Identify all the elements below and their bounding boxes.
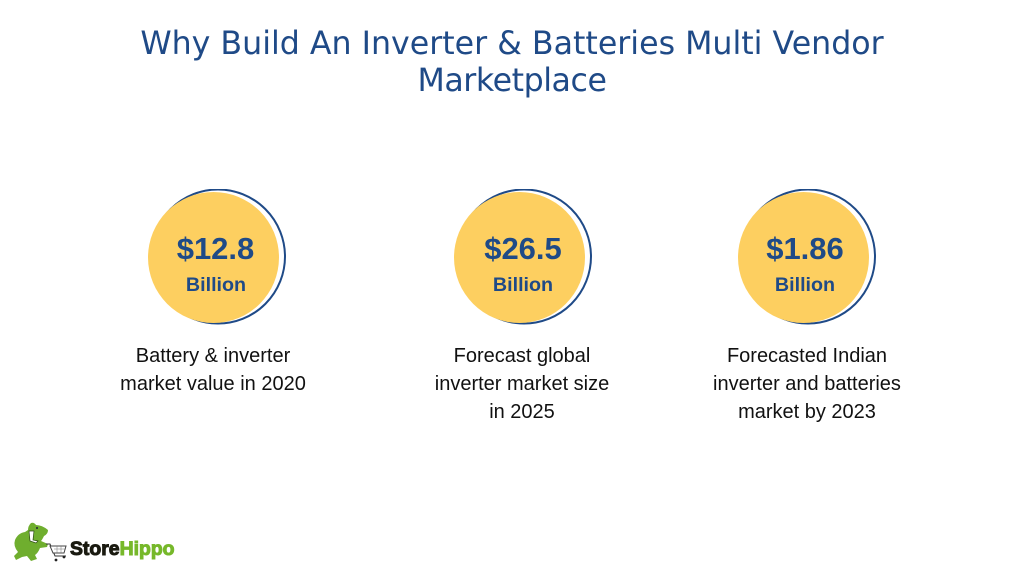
- description: forecast global inverter market: [435, 345, 609, 423]
- stat circle: $26.5 Billion: [454, 189, 592, 324]
- stat circle: $26.5 Billion: $26.5: [484, 231, 562, 266]
- description: forecasted Indian market: [713, 345, 901, 423]
- title: [140, 26, 884, 99]
- title: Why Build An Inverter & Batteries Multi Vendor: [140, 26, 884, 62]
- stat circle: $1.86 Billion: [738, 189, 876, 324]
- description: battery and inverter market value: [120, 345, 306, 395]
- stat circle: $12.8 Billion: $12.8: [177, 231, 254, 266]
- description: forecast global inverter market: inverter market size: [435, 373, 609, 395]
- description: forecasted Indian market: Forecasted Indian: [727, 345, 887, 367]
- stat circle: $1.86 Billion: $1.86: [766, 231, 844, 266]
- stat circle: $12.8 Billion: [148, 189, 286, 324]
- description: forecast global inverter market: Forecast global: [454, 345, 590, 367]
- stat circle: $26.5 Billion: Billion: [493, 274, 553, 296]
- description: battery and inverter market value: market value in 2020: [120, 373, 306, 395]
- title: Marketplace: [418, 63, 606, 99]
- icon: green hippo with shopping cart: [14, 522, 67, 562]
- stat circle: $1.86 Billion: Billion: [775, 274, 835, 296]
- description: forecasted Indian market: inverter and batteries: [713, 373, 901, 395]
- description: forecast global inverter market: in 2025: [489, 401, 555, 423]
- description: battery and inverter market value: Battery & inverter: [136, 345, 290, 367]
- logo: StoreHippo: [14, 522, 175, 562]
- description: forecasted Indian market: market by 2023: [738, 401, 876, 423]
- stat circle: $12.8 Billion: Billion: [186, 274, 246, 296]
- logo wordmark: StoreHippo: [70, 538, 175, 560]
